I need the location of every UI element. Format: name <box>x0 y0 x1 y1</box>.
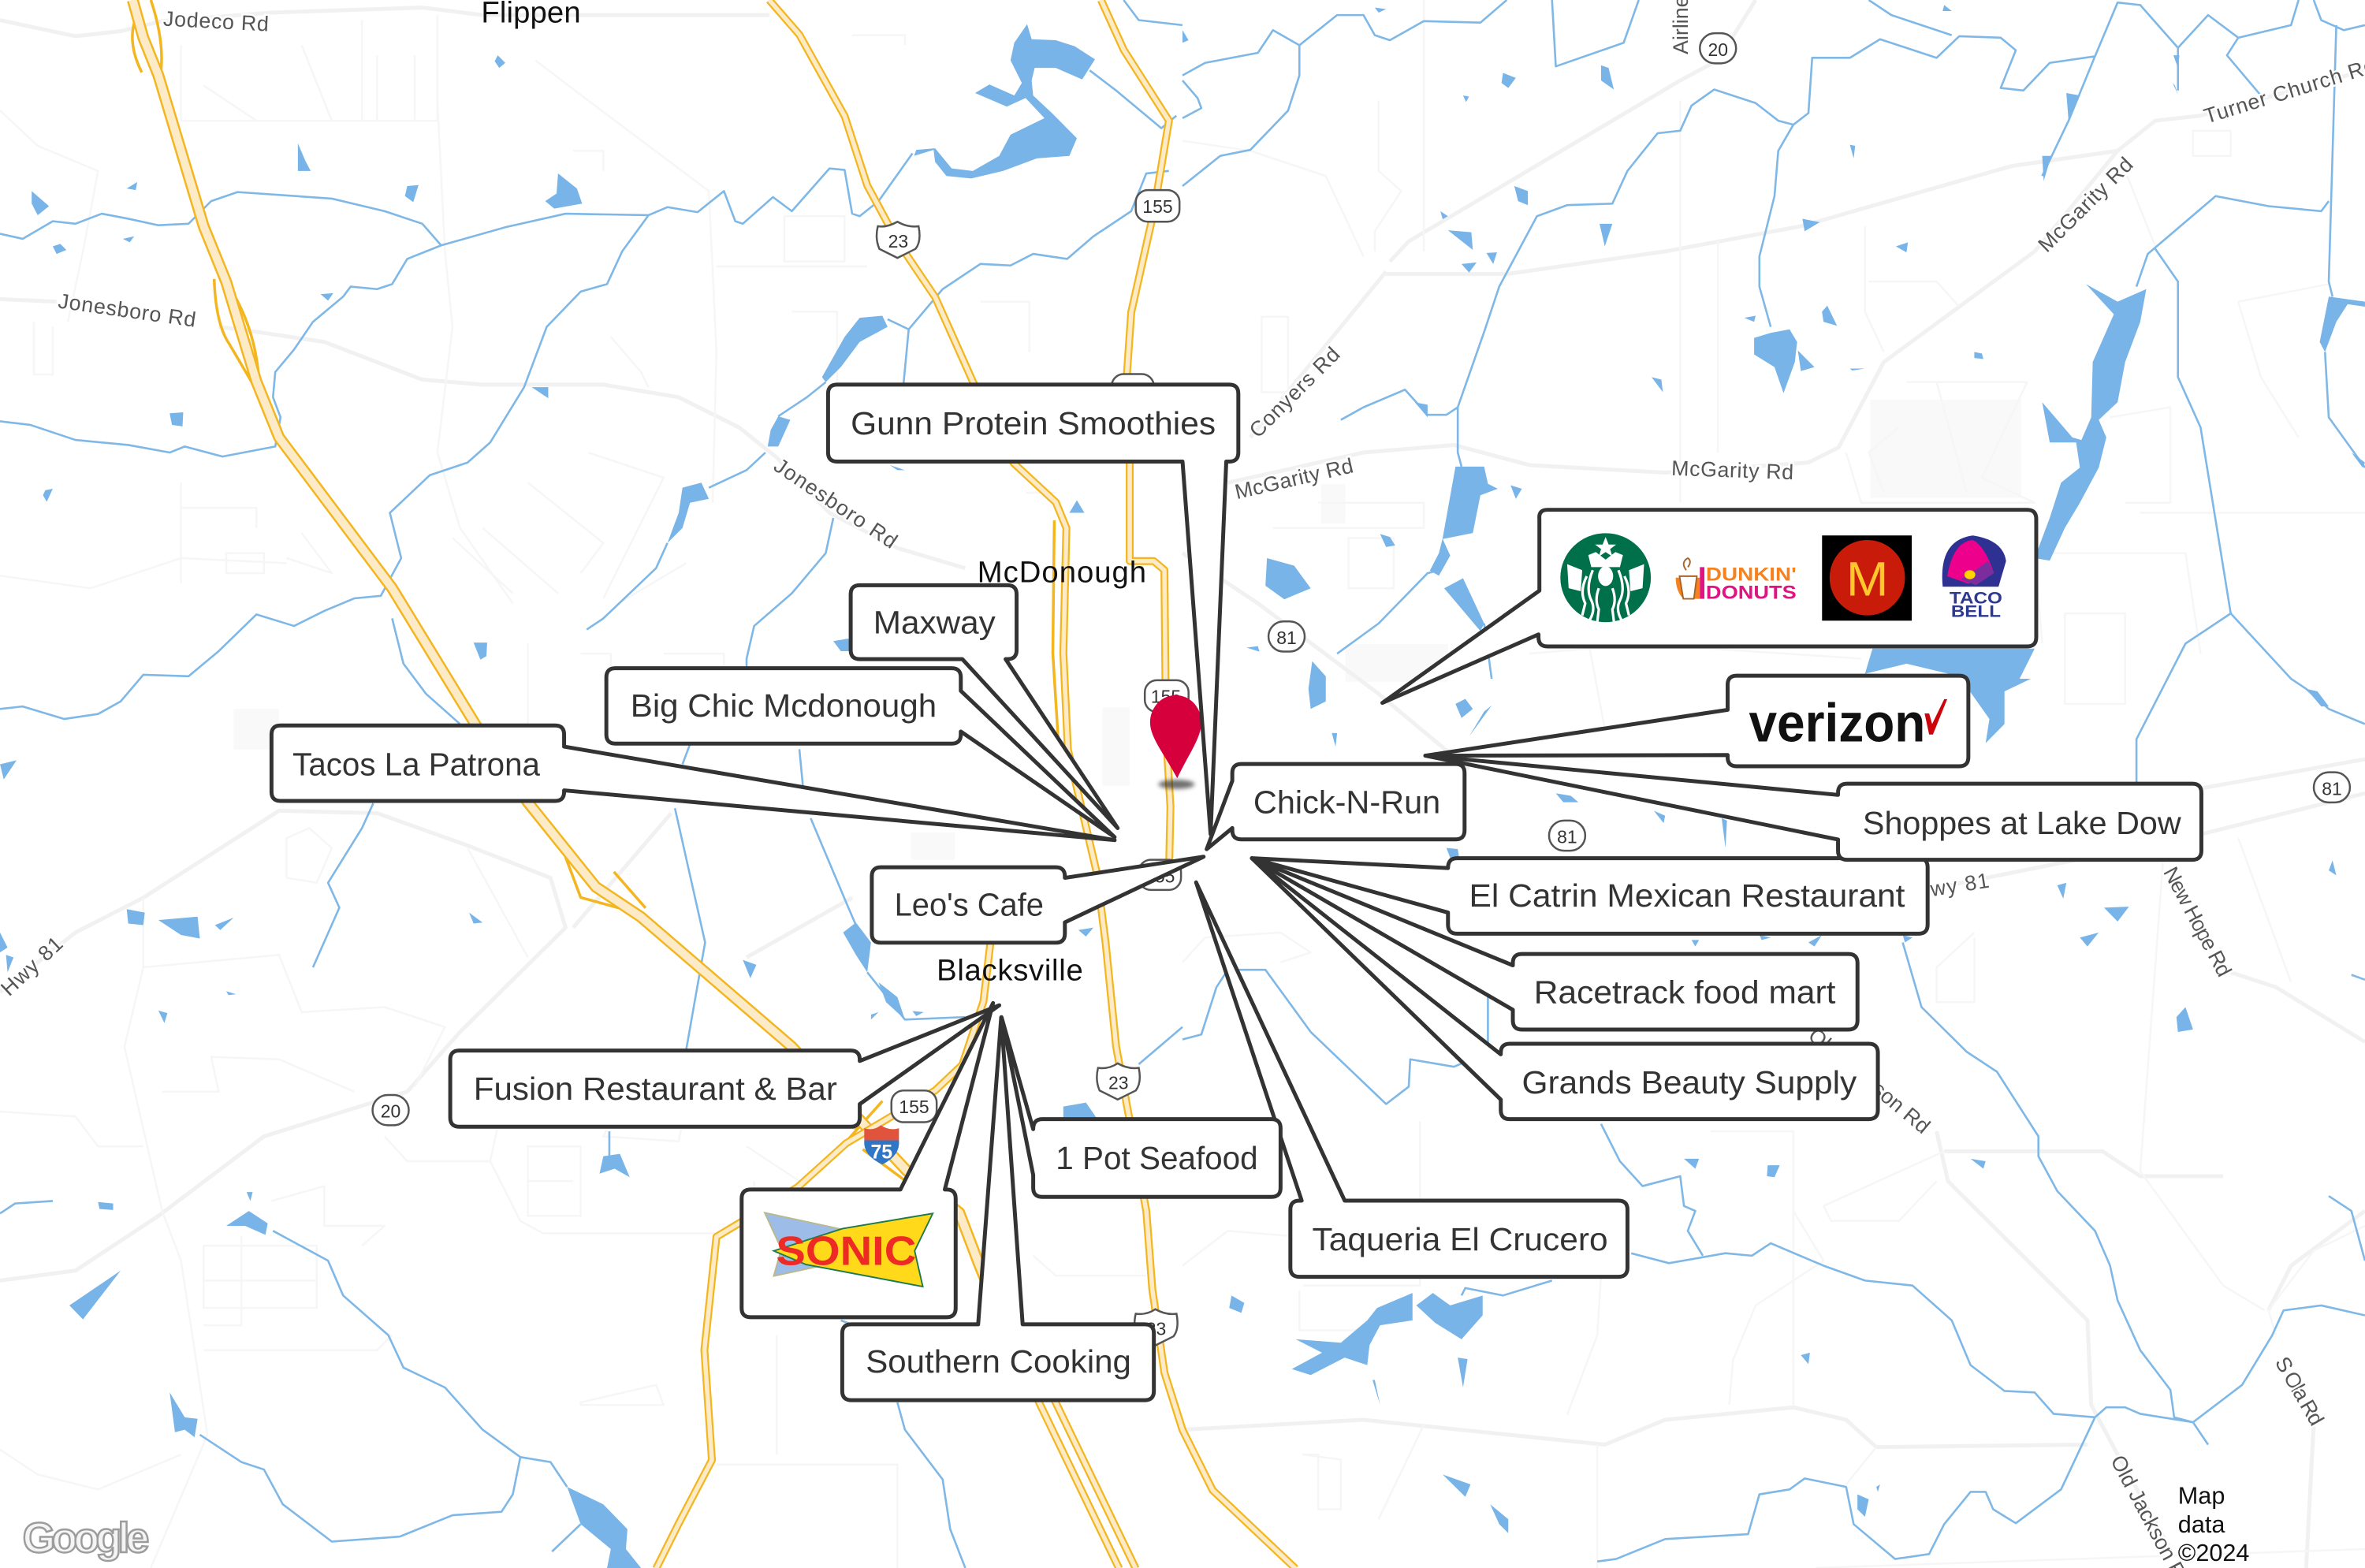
road label: New Hope Rd: New Hope Rd <box>2158 863 2237 981</box>
shield: US 23 south: 23 <box>1108 1072 1128 1093</box>
logo: Starbucks <box>1560 533 1651 622</box>
shield: 20 south-west <box>373 1095 409 1125</box>
neighbourhood streets south-east <box>1182 838 2365 1568</box>
water bodies north-west <box>0 24 1095 780</box>
shield: 81 south-east <box>1549 821 1585 851</box>
map data attribution: ©2024 <box>2178 1540 2249 1566</box>
callout: Tacos La Patrona: Tacos La Patrona <box>292 746 540 782</box>
map data attribution <box>2178 1483 2249 1566</box>
shield: 155 north: 155 <box>1142 196 1173 217</box>
shield: 155 south-west: 155 <box>899 1097 929 1117</box>
water bodies south-west <box>0 909 1097 1568</box>
logo: Dunkin Donuts: DUNKIN' <box>1706 564 1797 586</box>
callout: Racetrack food mart: Racetrack food mart <box>1534 974 1836 1010</box>
south-east quadrant of map <box>1182 793 2365 1568</box>
streams north-west <box>0 0 1182 788</box>
place label: Blacksville: Blacksville <box>937 954 1083 988</box>
shield: 81 far east: 81 <box>2322 778 2342 799</box>
road label: S Ola Rd: S Ola Rd <box>2270 1353 2329 1430</box>
logo: McDonald's <box>1822 535 1912 620</box>
shield: 20 north-east <box>1700 33 1736 63</box>
callout: Grands Beauty Supply <box>1252 858 1878 1119</box>
water bodies south-east <box>1229 793 2337 1533</box>
interchange ramps <box>132 0 920 1192</box>
road label: Hwy 81 east: Hwy 81 <box>1912 869 1991 903</box>
shield: US 23 far south: 23 <box>1146 1318 1166 1339</box>
callout: Fusion Restaurant and Bar: Fusion Restaurant & Bar <box>474 1071 837 1107</box>
shield: interstate 75: 75 <box>870 1141 892 1163</box>
shield: 81 far east <box>2314 773 2350 803</box>
callout: Taqueria El Crucero: Taqueria El Crucero <box>1313 1221 1608 1257</box>
logo: McDonald's: M <box>1846 553 1888 606</box>
callout: 1 Pot Seafood: 1 Pot Seafood <box>1056 1140 1258 1176</box>
shield: 155 behind pin: 155 <box>1151 687 1181 707</box>
shield: 155 north <box>1136 190 1179 222</box>
callout: Gunn Protein Smoothies: Gunn Protein Smoothies <box>851 405 1216 441</box>
logo: Dunkin Donuts: DONUTS <box>1706 583 1797 604</box>
neighbourhood streets north-west <box>0 15 1056 739</box>
map data attribution: Map <box>2178 1483 2225 1510</box>
callout: Fusion Restaurant and Bar <box>450 1005 1000 1127</box>
north-east quadrant of map <box>1182 0 2365 788</box>
pin shadow <box>1158 780 1194 789</box>
pin marker <box>1150 695 1201 778</box>
shield: US 23 south <box>1097 1063 1140 1100</box>
shield: 155 south-west <box>892 1090 937 1122</box>
callout: Maxway <box>851 585 1118 828</box>
google logo: Google <box>23 1515 149 1562</box>
building footprints <box>234 400 2021 860</box>
shield: 155 behind pin <box>1145 680 1189 712</box>
logo: Taco Bell: TACO <box>1950 589 2002 607</box>
shield: US 23 north: 23 <box>888 231 908 251</box>
logo: Sonic <box>765 1212 933 1287</box>
minor roads south-east <box>1182 793 2365 1568</box>
route 155 north <box>1101 0 1171 875</box>
callout: Southern Cooking <box>842 1017 1154 1400</box>
callouts <box>271 385 2201 1400</box>
shield: 155 near Leo's Cafe <box>1139 860 1181 890</box>
callout: Taqueria El Crucero <box>1196 882 1627 1277</box>
callout: Gunn Protein Smoothies <box>828 385 1238 834</box>
streams south-west <box>0 803 1182 1568</box>
callout: Grands Beauty Supply: Grands Beauty Supply <box>1522 1064 1857 1101</box>
callout: Tacos La Patrona <box>271 725 1115 840</box>
shield: 20 north-east: 20 <box>1708 39 1728 60</box>
shield: US 23 north <box>877 222 919 258</box>
callout: 1 Pot Seafood <box>1001 1017 1280 1197</box>
road label: McGarity Rd east: McGarity Rd <box>2033 153 2138 257</box>
US 23 <box>769 0 1296 1568</box>
neighbourhood streets north-east <box>1182 0 2365 729</box>
shield: 155 near Leo's Cafe: 155 <box>1145 866 1175 886</box>
shield: 81 south-east: 81 <box>1557 827 1577 847</box>
south-west quadrant of map <box>0 803 1182 1568</box>
callout: Big Chic Mcdonough: Big Chic Mcdonough <box>631 687 937 724</box>
shield: 81 east: 81 <box>1276 628 1297 648</box>
water bodies north-east <box>1182 5 2365 747</box>
callout: Leo's Cafe <box>872 857 1204 943</box>
road label: Jackson Rd behind callouts: Ole Jackson Rd <box>1804 1023 1935 1138</box>
location pin <box>1150 695 1201 789</box>
logo: Sonic: SONIC <box>776 1227 916 1273</box>
US 23 parallel lane <box>1052 520 1059 750</box>
road label: McGarity Rd west: McGarity Rd <box>1233 453 1355 504</box>
callout: Chick-N-Run: Chick-N-Run <box>1253 784 1440 820</box>
callout: Southern Cooking: Southern Cooking <box>866 1343 1131 1380</box>
interstate 75 <box>132 0 996 1305</box>
logo: Taco Bell: BELL <box>1951 603 2001 621</box>
callout: Maxway: Maxway <box>873 605 996 641</box>
callout: Shoppes at Lake Dow: Shoppes at Lake Dow <box>1863 805 2181 841</box>
callout: Chick-N-Run <box>1207 764 1465 849</box>
callout: Verizon <box>1425 676 1968 766</box>
shield: 81 east <box>1268 621 1305 652</box>
callout: Big Chic Mcdonough <box>606 669 1115 837</box>
north-west quadrant of map <box>0 0 1182 788</box>
callout: Leo's Cafe: Leo's Cafe <box>895 886 1044 922</box>
minor roads north-east <box>1182 0 2365 788</box>
logo: Verizon check mark <box>1924 699 1947 735</box>
road label: Conyers Rd: Conyers Rd <box>1245 342 1344 442</box>
streams south-east <box>1182 943 2365 1562</box>
interstate 75 southern lanes <box>996 1305 1136 1568</box>
route 155 south-west <box>656 938 991 1568</box>
minor roads south-west <box>0 810 852 1280</box>
callout: El Catrin Mexican Restaurant: El Catrin Mexican Restaurant <box>1469 877 1905 914</box>
streams north-east <box>1182 0 2365 788</box>
highways <box>132 0 1296 1568</box>
road label: McGarity Rd centre: McGarity Rd <box>1671 456 1794 484</box>
map data attribution: data <box>2178 1511 2225 1538</box>
callout: restaurant logos <box>1383 510 2036 703</box>
road label: Jonesboro Rd west: Jonesboro Rd <box>57 289 197 332</box>
neighbourhood streets south-west <box>0 828 1146 1568</box>
callout: Racetrack food mart <box>1252 858 1857 1030</box>
callout: Shoppes at Lake Dow <box>1425 756 2201 860</box>
logo: Taco Bell <box>1942 535 2006 621</box>
shield: 155 behind Gunn callout <box>1112 374 1154 404</box>
road label: Jodeco Rd: Jodeco Rd <box>162 7 270 36</box>
callout: El Catrin Mexican Restaurant <box>1252 858 1927 933</box>
logo: Dunkin Donuts <box>1676 558 1797 604</box>
shield: interstate 75 <box>864 1125 899 1164</box>
minor roads north-west <box>0 8 965 568</box>
shield: 20 south-west: 20 <box>381 1101 400 1122</box>
shield: US 23 far south <box>1134 1309 1178 1346</box>
road label: Jonesboro Rd centre: Jonesboro Rd <box>769 453 902 553</box>
callout: Sonic <box>742 1003 993 1317</box>
logo: Verizon wordmark: verizon <box>1749 692 1925 753</box>
place label: McDonough: McDonough <box>978 556 1146 590</box>
